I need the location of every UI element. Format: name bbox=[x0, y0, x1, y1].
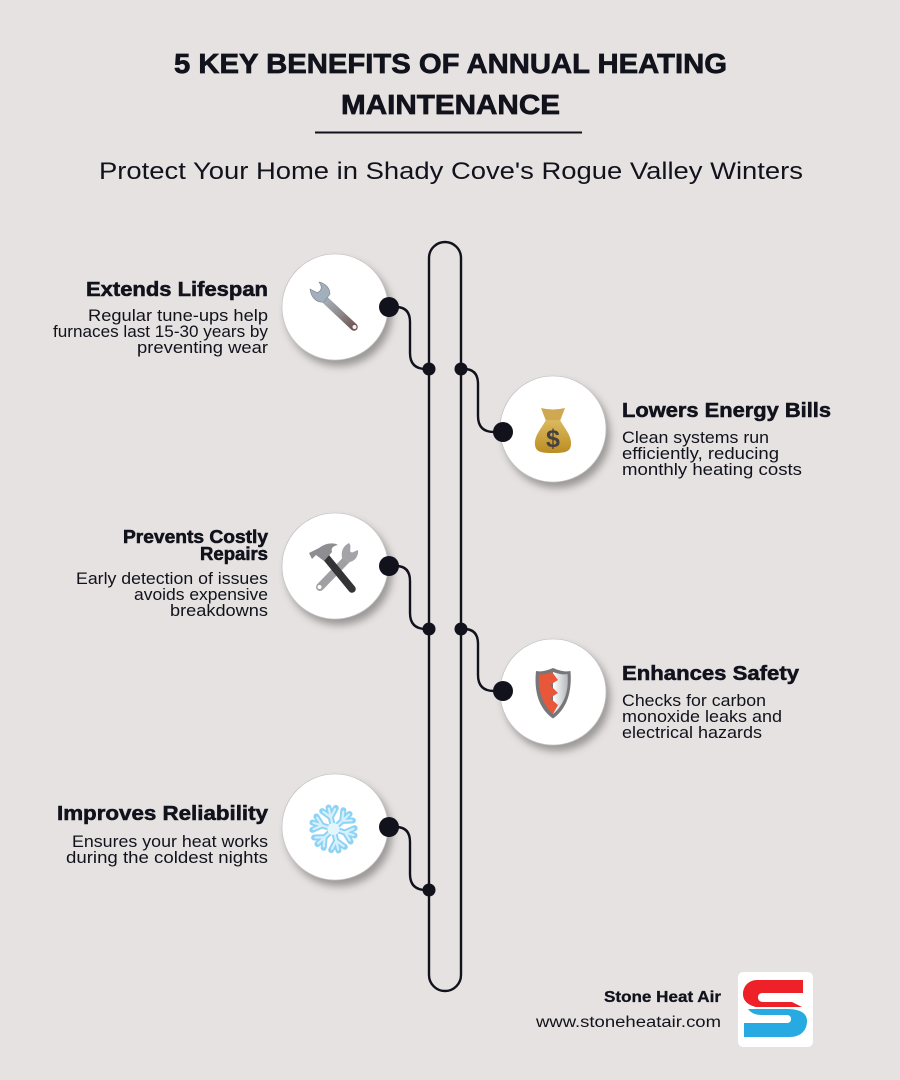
pipeline nodes bbox=[422, 362, 468, 896]
description: Regular tune-ups help bbox=[88, 307, 268, 325]
connector dot bbox=[379, 556, 399, 576]
website: www.stoneheatair.com bbox=[535, 1014, 721, 1031]
description: Early detection of issues bbox=[76, 570, 268, 588]
description: monthly heating costs bbox=[622, 461, 802, 479]
description: furnaces last 15-30 years by bbox=[53, 323, 269, 341]
heading: Extends Lifespan bbox=[86, 279, 268, 301]
description bbox=[76, 570, 268, 620]
icon circle: shield bbox=[500, 639, 606, 745]
description bbox=[622, 692, 782, 742]
connector dot bbox=[379, 297, 399, 317]
title: 5 KEY BENEFITS OF ANNUAL HEATING bbox=[174, 48, 727, 79]
company name: Stone Heat Air bbox=[604, 989, 721, 1006]
icon circle: snowflake bbox=[282, 774, 388, 880]
step 1: extends lifespan bbox=[53, 254, 399, 360]
description: during the coldest nights bbox=[66, 849, 268, 867]
step 5: improves reliability bbox=[57, 774, 399, 880]
logo bbox=[738, 972, 813, 1047]
heading: Repairs bbox=[200, 544, 268, 564]
step 3: prevents costly repairs bbox=[76, 513, 399, 620]
description: Ensures your heat works bbox=[72, 833, 268, 851]
description: Clean systems run bbox=[622, 429, 769, 447]
step 4: enhances safety bbox=[493, 639, 800, 745]
heading: Prevents Costly bbox=[123, 527, 268, 547]
description: Checks for carbon bbox=[622, 692, 766, 710]
description: efficiently, reducing bbox=[622, 445, 779, 463]
title bbox=[174, 48, 727, 120]
description bbox=[622, 429, 802, 479]
description bbox=[66, 833, 268, 867]
heading bbox=[123, 527, 268, 564]
connector dot bbox=[379, 817, 399, 837]
icon circle: money bag: $ bbox=[546, 425, 560, 453]
heading: Lowers Energy Bills bbox=[622, 400, 831, 422]
icon circle: wrench bbox=[282, 254, 388, 360]
footer brand bbox=[535, 972, 813, 1047]
description: preventing wear bbox=[137, 339, 269, 357]
heading: Enhances Safety bbox=[622, 663, 800, 685]
connector dot bbox=[493, 681, 513, 701]
description: monoxide leaks and bbox=[622, 708, 782, 726]
description bbox=[53, 307, 269, 357]
description: breakdowns bbox=[170, 602, 268, 620]
central pipeline bbox=[429, 242, 461, 991]
subtitle: Protect Your Home in Shady Cove's Rogue Valley Winters bbox=[99, 158, 803, 185]
connector dot bbox=[493, 422, 513, 442]
title: MAINTENANCE bbox=[341, 89, 560, 120]
description: avoids expensive bbox=[134, 586, 268, 604]
heading: Improves Reliability bbox=[57, 803, 269, 825]
connectors bbox=[389, 307, 503, 890]
description: electrical hazards bbox=[622, 724, 762, 742]
icon circle: money bag bbox=[500, 376, 606, 482]
icon circle: hammer and wrench bbox=[282, 513, 388, 619]
step 2: lowers energy bills bbox=[493, 376, 831, 482]
